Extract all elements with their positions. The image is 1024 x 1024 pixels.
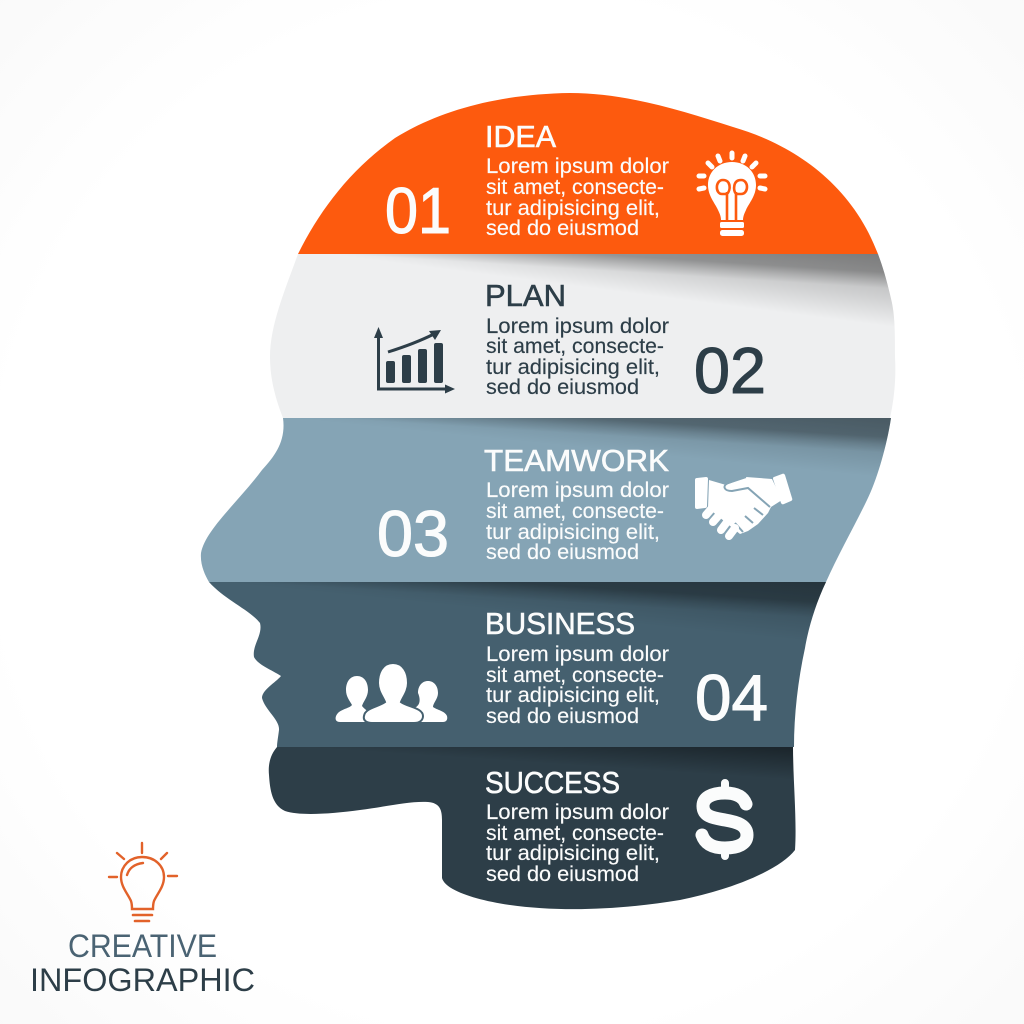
number 04: 04 bbox=[695, 661, 768, 734]
text block: idea body: sed do eiusmod bbox=[486, 217, 639, 240]
text block: plan body bbox=[486, 315, 669, 399]
text block: idea body: Lorem ipsum dolor bbox=[486, 155, 669, 178]
text block: teamwork body bbox=[486, 479, 669, 564]
panel: 04 business bbox=[205, 582, 835, 747]
text block: success body: sed do eiusmod bbox=[486, 863, 639, 886]
text block: teamwork body: sit amet, consecte- bbox=[486, 500, 664, 523]
text: infographic: INFOGRAPHIC bbox=[30, 962, 255, 998]
logo: creative infographic bbox=[30, 843, 255, 998]
text block: business body: sed do eiusmod bbox=[486, 705, 639, 728]
heading: business: BUSINESS bbox=[485, 606, 635, 641]
text block: teamwork body: tur adipisicing elit, bbox=[486, 521, 660, 544]
heading: idea: IDEA bbox=[485, 119, 556, 154]
text block: business body: Lorem ipsum dolor bbox=[486, 643, 669, 666]
text block: teamwork body: sed do eiusmod bbox=[486, 541, 639, 564]
text block: idea body bbox=[486, 155, 669, 240]
text block: success body: Lorem ipsum dolor bbox=[486, 801, 669, 824]
text block: business body: tur adipisicing elit, bbox=[486, 684, 660, 707]
infographic canvas bbox=[33, 93, 896, 992]
text block: success body: tur adipisicing elit, bbox=[486, 842, 660, 865]
text block: business body: sit amet, consecte- bbox=[486, 664, 664, 687]
panel: 01 idea bbox=[298, 93, 878, 254]
icon: handshake bbox=[695, 474, 792, 536]
text block: idea body: sit amet, consecte- bbox=[486, 176, 664, 199]
heading: plan: PLAN bbox=[485, 278, 566, 313]
icon: outline light bulb bbox=[109, 843, 177, 921]
text block: plan body: tur adipisicing elit, bbox=[486, 356, 660, 379]
panel: 02 plan bbox=[265, 254, 900, 418]
text block: idea body: tur adipisicing elit, bbox=[486, 197, 660, 220]
text block: success body: sit amet, consecte- bbox=[486, 822, 664, 845]
text: creative: CREATIVE bbox=[68, 928, 217, 964]
icon: light bulb bbox=[699, 153, 765, 236]
number 02: 02 bbox=[694, 334, 766, 407]
icon: dollar sign bbox=[702, 783, 747, 856]
text block: plan body: Lorem ipsum dolor bbox=[486, 315, 669, 338]
icon: bar chart with arrow bbox=[374, 327, 455, 394]
text block: teamwork body: Lorem ipsum dolor bbox=[486, 479, 669, 502]
text block: business body bbox=[486, 643, 669, 728]
heading: teamwork: TEAMWORK bbox=[484, 443, 669, 478]
text block: success body bbox=[486, 801, 669, 886]
panel: 05 success bbox=[265, 747, 800, 909]
icon: people group bbox=[336, 663, 447, 723]
text block: plan body: sed do eiusmod bbox=[486, 376, 639, 399]
number 03: 03 bbox=[377, 497, 449, 570]
number 01: 01 bbox=[385, 174, 451, 247]
panel: 03 teamwork bbox=[201, 418, 900, 582]
text block: plan body: sit amet, consecte- bbox=[486, 335, 664, 358]
heading: success: SUCCESS bbox=[485, 765, 620, 800]
